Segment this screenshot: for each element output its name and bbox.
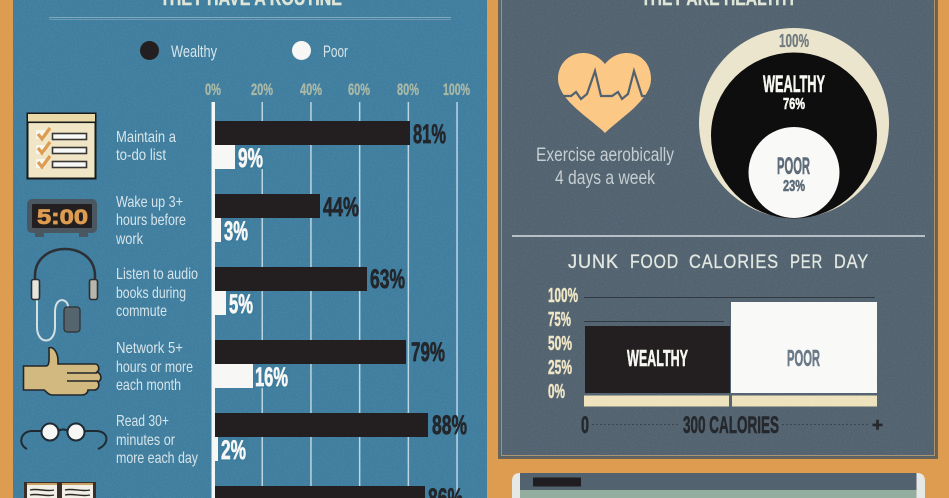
legend: Wealthy — [171, 42, 217, 61]
row: network: 16% — [255, 362, 288, 392]
row: audio books: 63% — [370, 264, 405, 294]
row: wake up: 44% — [323, 192, 359, 222]
icon: alarm clock: 5:00 — [37, 206, 88, 229]
row: audio books: 5% — [229, 289, 253, 319]
axis labels — [205, 80, 470, 99]
axis labels: 60% — [348, 80, 370, 99]
bar chart: routine habits — [212, 102, 467, 498]
habit labels: work — [115, 231, 144, 248]
habit labels: to-do list — [116, 147, 166, 164]
panel: bottom card — [512, 473, 925, 498]
habit labels: minutes or — [116, 432, 176, 449]
heading: junk food calories per day: PER — [790, 252, 823, 273]
habit labels: Wake up 3+ — [116, 194, 183, 211]
legend: Poor — [323, 42, 348, 61]
bar: poor — [731, 302, 877, 393]
y axis labels — [548, 285, 578, 403]
row: to-do list: 81% — [413, 119, 446, 149]
heading: junk food calories per day: DAY — [834, 252, 869, 273]
chart: nested circles: POOR — [777, 153, 810, 180]
row: network: 79% — [411, 337, 445, 367]
habit labels: each month — [116, 377, 181, 394]
row: wake up: 3% — [224, 216, 248, 246]
text: exercise aerobically: 4 days a week — [555, 168, 655, 189]
chart: nested circles — [699, 28, 889, 218]
text: exercise aerobically: Exercise aerobically — [536, 145, 674, 166]
habit labels: books during — [116, 285, 186, 302]
chart: nested circles: 23% — [783, 178, 805, 195]
axis labels: 20% — [251, 80, 273, 99]
row: read: 2% — [221, 435, 246, 465]
icon: hand — [24, 348, 101, 395]
habit labels: Read 30+ — [116, 413, 169, 430]
row: network — [213, 337, 445, 392]
habit labels: Listen to audio — [116, 266, 198, 283]
icon: open book — [24, 482, 96, 498]
axis labels: 100% — [443, 80, 470, 99]
row: read: 88% — [432, 410, 467, 440]
chart: junk food calories — [548, 285, 883, 439]
x axis: 0 — [581, 412, 589, 439]
axis labels: 40% — [300, 80, 322, 99]
habit labels: more each day — [116, 450, 198, 467]
x axis: 300 CALORIES — [683, 412, 779, 439]
y axis labels: 100% — [548, 285, 578, 307]
heading: junk food calories per day: JUNK — [568, 252, 619, 273]
heading: junk food calories per day: FOOD — [630, 252, 679, 273]
panel: they have a routine — [13, 0, 487, 498]
habit labels: hours or more — [116, 359, 193, 376]
habit labels: Maintain a — [116, 129, 176, 146]
legend — [140, 41, 348, 61]
y axis labels: 25% — [548, 357, 572, 379]
y axis labels: 75% — [548, 309, 571, 331]
row: audio books — [213, 264, 405, 319]
chart: nested circles: WEALTHY — [763, 71, 825, 98]
icon: heart with pulse — [558, 53, 651, 133]
row: read — [213, 410, 467, 465]
habit labels — [115, 129, 198, 467]
x axis: + — [872, 415, 883, 435]
icon: glasses — [21, 424, 106, 449]
heading: junk food calories per day: CALORIES — [689, 252, 779, 273]
bar: wealthy — [585, 326, 730, 393]
habit labels: Network 5+ — [116, 340, 183, 357]
bar: poor: POOR — [787, 345, 820, 371]
panel: they are healthy — [499, 0, 937, 458]
row: to-do list — [213, 119, 446, 173]
icon: alarm clock — [27, 199, 97, 237]
habit labels: commute — [116, 303, 167, 320]
y axis labels: 0% — [548, 381, 565, 403]
x axis — [581, 412, 883, 439]
y axis labels: 50% — [548, 333, 572, 355]
text: exercise aerobically — [536, 145, 674, 189]
habit labels: hours before — [116, 212, 186, 229]
bar: wealthy: WEALTHY — [627, 345, 688, 371]
axis labels: 80% — [397, 80, 419, 99]
row: sixth habit — [215, 483, 463, 498]
icon: checklist — [27, 114, 96, 178]
row: to-do list: 9% — [238, 143, 263, 173]
chart: nested circles: 100% — [779, 31, 809, 51]
chart: nested circles: 76% — [783, 96, 805, 113]
axis labels: 0% — [205, 80, 221, 99]
row: wake up — [213, 192, 359, 246]
icon: headphones — [32, 249, 98, 340]
heading: junk food calories per day — [568, 252, 869, 273]
